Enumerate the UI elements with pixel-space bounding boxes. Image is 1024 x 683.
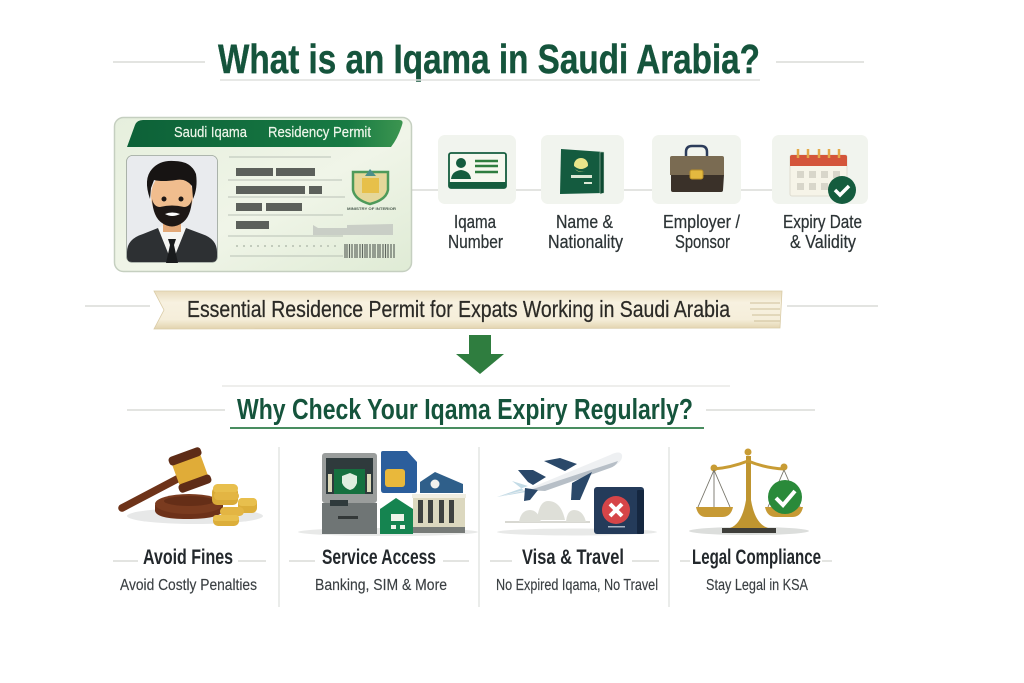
label: employer or sponsor: Sponsor [675,231,730,252]
subtext: legal compliance: Stay Legal in KSA [706,577,808,594]
panel: name and nationality [541,135,624,252]
label: iqama number: Number [448,231,503,252]
label: expiry date and validity [783,211,862,252]
icon: briefcase [670,146,724,192]
panel: iqama card [114,118,412,272]
card barcode [345,244,394,258]
panel: visa and travel [490,452,659,594]
card header band: Saudi Iqama [174,124,248,141]
card emblem: MINISTRY OF INTERIOR [347,206,396,211]
icon: calendar [790,149,856,204]
panel: avoid fines [113,446,266,594]
portrait photo [126,156,218,263]
card emblem [347,169,396,211]
label: name and nationality: Name & [556,211,614,232]
icon: id card [449,153,506,188]
banner ribbon [85,291,878,329]
label: name and nationality: Nationality [548,231,624,252]
card data bars [228,157,345,256]
section heading: Why Check Your Iqama Expiry Regularly? [237,394,693,426]
heading: service access: Service Access [322,546,436,569]
label: name and nationality [548,211,624,252]
label: iqama number [448,211,503,252]
label: expiry date and validity: & Validity [790,231,857,252]
panel: expiry date and validity [772,135,868,252]
banner ribbon: Essential Residence Permit for Expats Working in Saudi Arabia [187,296,730,322]
panel: employer or sponsor [652,135,741,252]
title: What is an Iqama in Saudi Arabia? [218,36,760,82]
subtext: visa and travel: No Expired Iqama, No Travel [496,577,658,594]
label: employer or sponsor: Employer / [663,211,741,232]
subtext: service access: Banking, SIM & More [315,577,447,594]
panel: iqama number [438,135,516,252]
label: iqama number: Iqama [454,211,497,232]
arrow down [456,335,504,374]
card header band [127,120,403,147]
heading: avoid fines: Avoid Fines [143,546,233,569]
heading: legal compliance: Legal Compliance [692,546,821,569]
heading: visa and travel: Visa & Travel [522,546,624,569]
panel: legal compliance [680,448,832,594]
label: expiry date and validity: Expiry Date [783,211,862,232]
connector line [412,189,772,191]
icon: passport [560,149,604,194]
subtext: avoid fines: Avoid Costly Penalties [120,577,257,594]
label: employer or sponsor [663,211,741,252]
icon: scales with check [689,448,809,535]
panel: service access [289,451,478,594]
icon: gavel and coins [122,446,263,526]
card stamp [313,224,393,235]
icon: plane and passport [497,452,657,536]
card header band: Residency Permit [268,124,372,141]
icon: atm, sim, bank [298,451,478,536]
